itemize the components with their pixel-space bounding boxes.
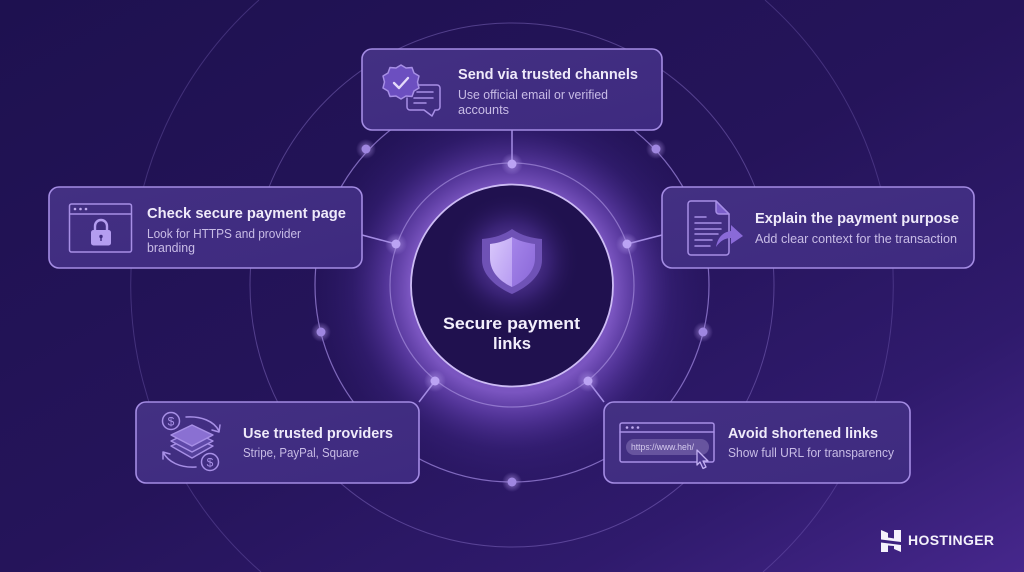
icon: shield xyxy=(482,229,542,294)
icon: verified badge and chat xyxy=(383,65,440,116)
concentric orbit rings xyxy=(131,0,893,572)
text: purpose heading: Explain the payment purpose xyxy=(755,210,959,227)
logo: hostinger xyxy=(881,530,994,552)
center title: links xyxy=(493,334,531,353)
text: channel heading: Send via trusted channels xyxy=(458,66,638,83)
icon: stacked layers with coins: $ xyxy=(168,414,175,428)
panel: explain the payment purpose xyxy=(662,187,974,268)
panel: avoid shortened links xyxy=(604,402,910,483)
center title: Secure payment xyxy=(443,314,580,333)
center hub xyxy=(411,184,613,386)
panel: send via trusted channels xyxy=(362,49,662,130)
text: secure page description: branding xyxy=(147,241,195,255)
connector lines xyxy=(362,130,662,402)
text: channel description: accounts xyxy=(458,103,509,117)
icon: browser with padlock xyxy=(70,204,132,252)
icon: document with arrow xyxy=(688,201,743,255)
panel: use trusted providers xyxy=(136,402,419,483)
text: providers description: Stripe, PayPal, Square xyxy=(243,446,359,460)
text: channel description: Use official email or verified xyxy=(458,88,608,102)
text: shortened links heading: Avoid shortened links xyxy=(728,425,878,442)
central glow xyxy=(307,85,717,495)
icon: browser url bar with cursor: https://www.heh/ xyxy=(631,442,694,453)
icon: browser url bar with cursor xyxy=(620,423,714,468)
text: purpose description: Add clear context for the transaction xyxy=(755,232,957,246)
text: shortened links description: Show full URL for transparency xyxy=(728,446,895,460)
text: secure page description: Look for HTTPS and provider xyxy=(147,227,301,241)
text: secure page heading: Check secure payment page xyxy=(147,205,346,222)
text: providers heading: Use trusted providers xyxy=(243,425,393,442)
logo: hostinger: HOSTINGER xyxy=(908,532,994,548)
panel: check secure payment page xyxy=(49,187,362,268)
icon: stacked layers with coins xyxy=(162,412,220,470)
orbit nodes xyxy=(311,139,713,492)
icon: stacked layers with coins: $ xyxy=(207,456,214,470)
